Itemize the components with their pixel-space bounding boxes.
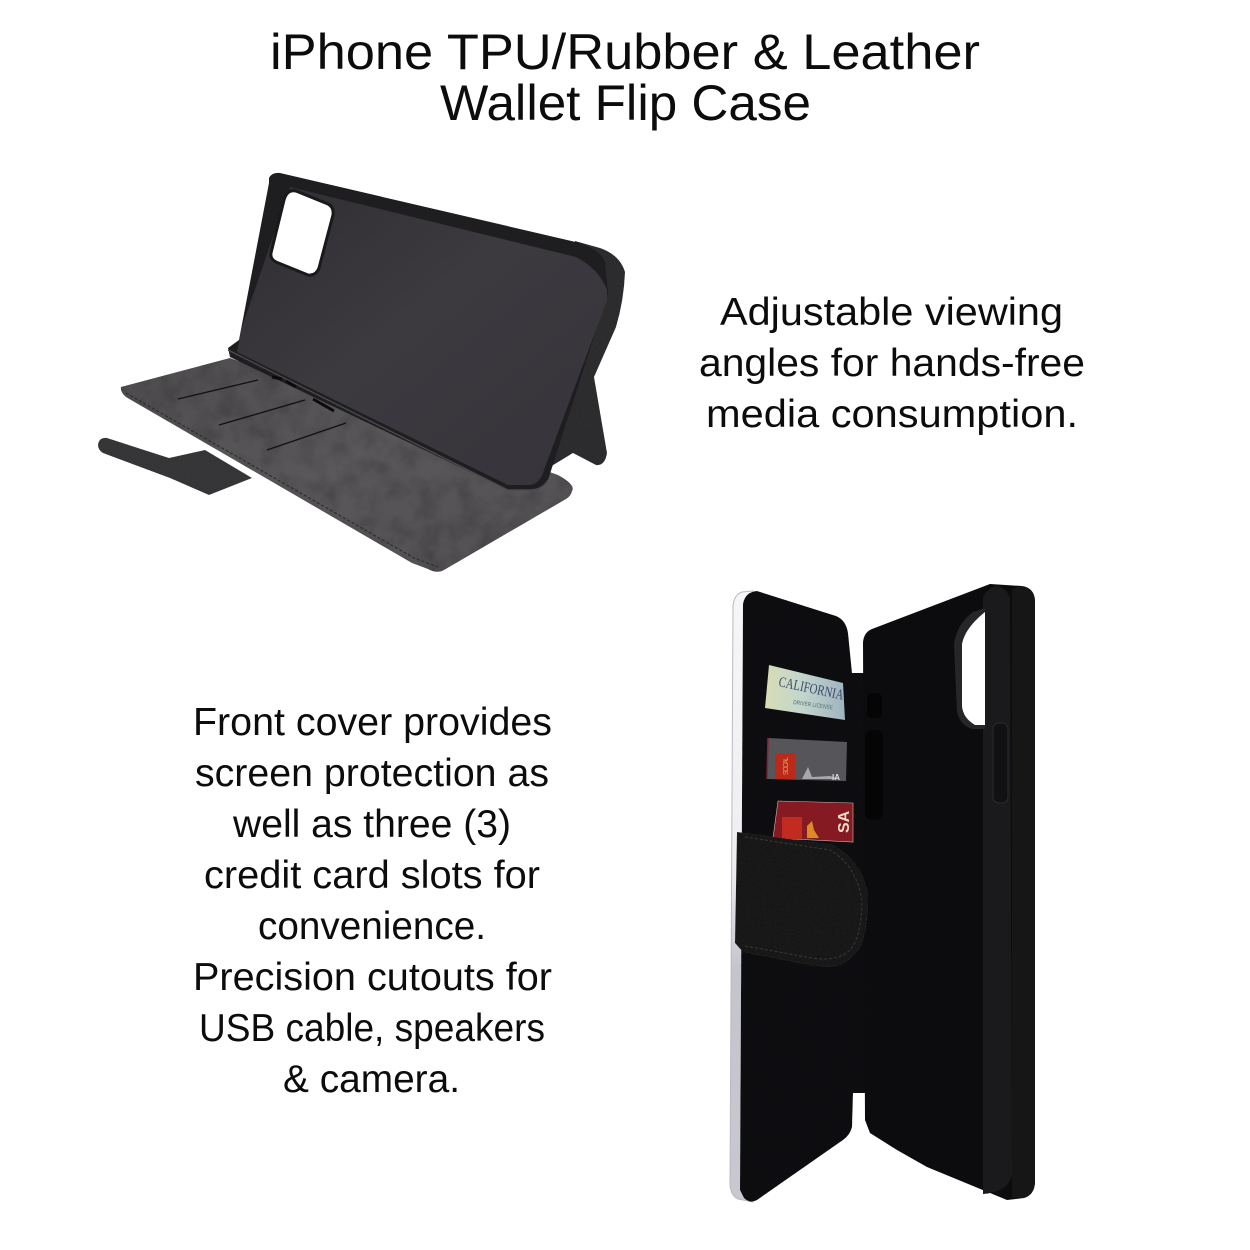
left feature text: well as three (3) — [232, 803, 511, 846]
right feature text: media consumption. — [706, 393, 1078, 436]
left feature text: convenience. — [258, 905, 486, 948]
left feature text: Precision cutouts for — [193, 956, 552, 999]
card: grey credit card: IA — [832, 773, 840, 782]
phone shell interior — [863, 584, 1035, 1200]
card: red credit card: SA — [836, 810, 853, 833]
open cover with card slots — [121, 358, 573, 572]
phone edge seen behind cover — [730, 591, 753, 1202]
title — [270, 24, 980, 131]
right feature text — [699, 291, 1085, 436]
phone shell — [228, 173, 608, 490]
left feature text: credit card slots for — [204, 854, 540, 897]
camera opening — [954, 608, 985, 729]
card: red credit card — [773, 801, 853, 842]
camera cutout — [271, 191, 333, 275]
right feature text: Adjustable viewing — [720, 291, 1063, 334]
card: California licence — [765, 665, 845, 720]
product photo: case open upright with card slots — [730, 584, 1035, 1202]
card: California licence: CALIFORNIA — [777, 674, 845, 704]
product photo: case standing in landscape with open cover — [98, 173, 625, 572]
card: grey credit card — [767, 738, 847, 782]
right feature text: angles for hands-free — [699, 342, 1085, 385]
left feature text: screen protection as — [195, 752, 549, 795]
back cover and stand — [545, 241, 625, 470]
magnetic clasp tab — [735, 832, 868, 967]
side button recess — [993, 723, 1008, 803]
inner cover — [740, 591, 866, 1202]
left feature text: Front cover provides — [193, 701, 552, 744]
title: iPhone TPU/Rubber & Leather — [270, 24, 980, 80]
left feature text: & camera. — [283, 1058, 460, 1101]
title: Wallet Flip Case — [440, 75, 811, 131]
card: grey credit card: SOCAL — [783, 757, 790, 775]
speaker and port cutouts — [867, 693, 882, 718]
left feature text: USB cable, speakers — [199, 1007, 545, 1050]
left feature text — [193, 701, 552, 1101]
card: California licence: DRIVER LICENSE — [793, 700, 833, 712]
clasp strap — [98, 438, 252, 495]
connector cutouts — [272, 377, 334, 411]
